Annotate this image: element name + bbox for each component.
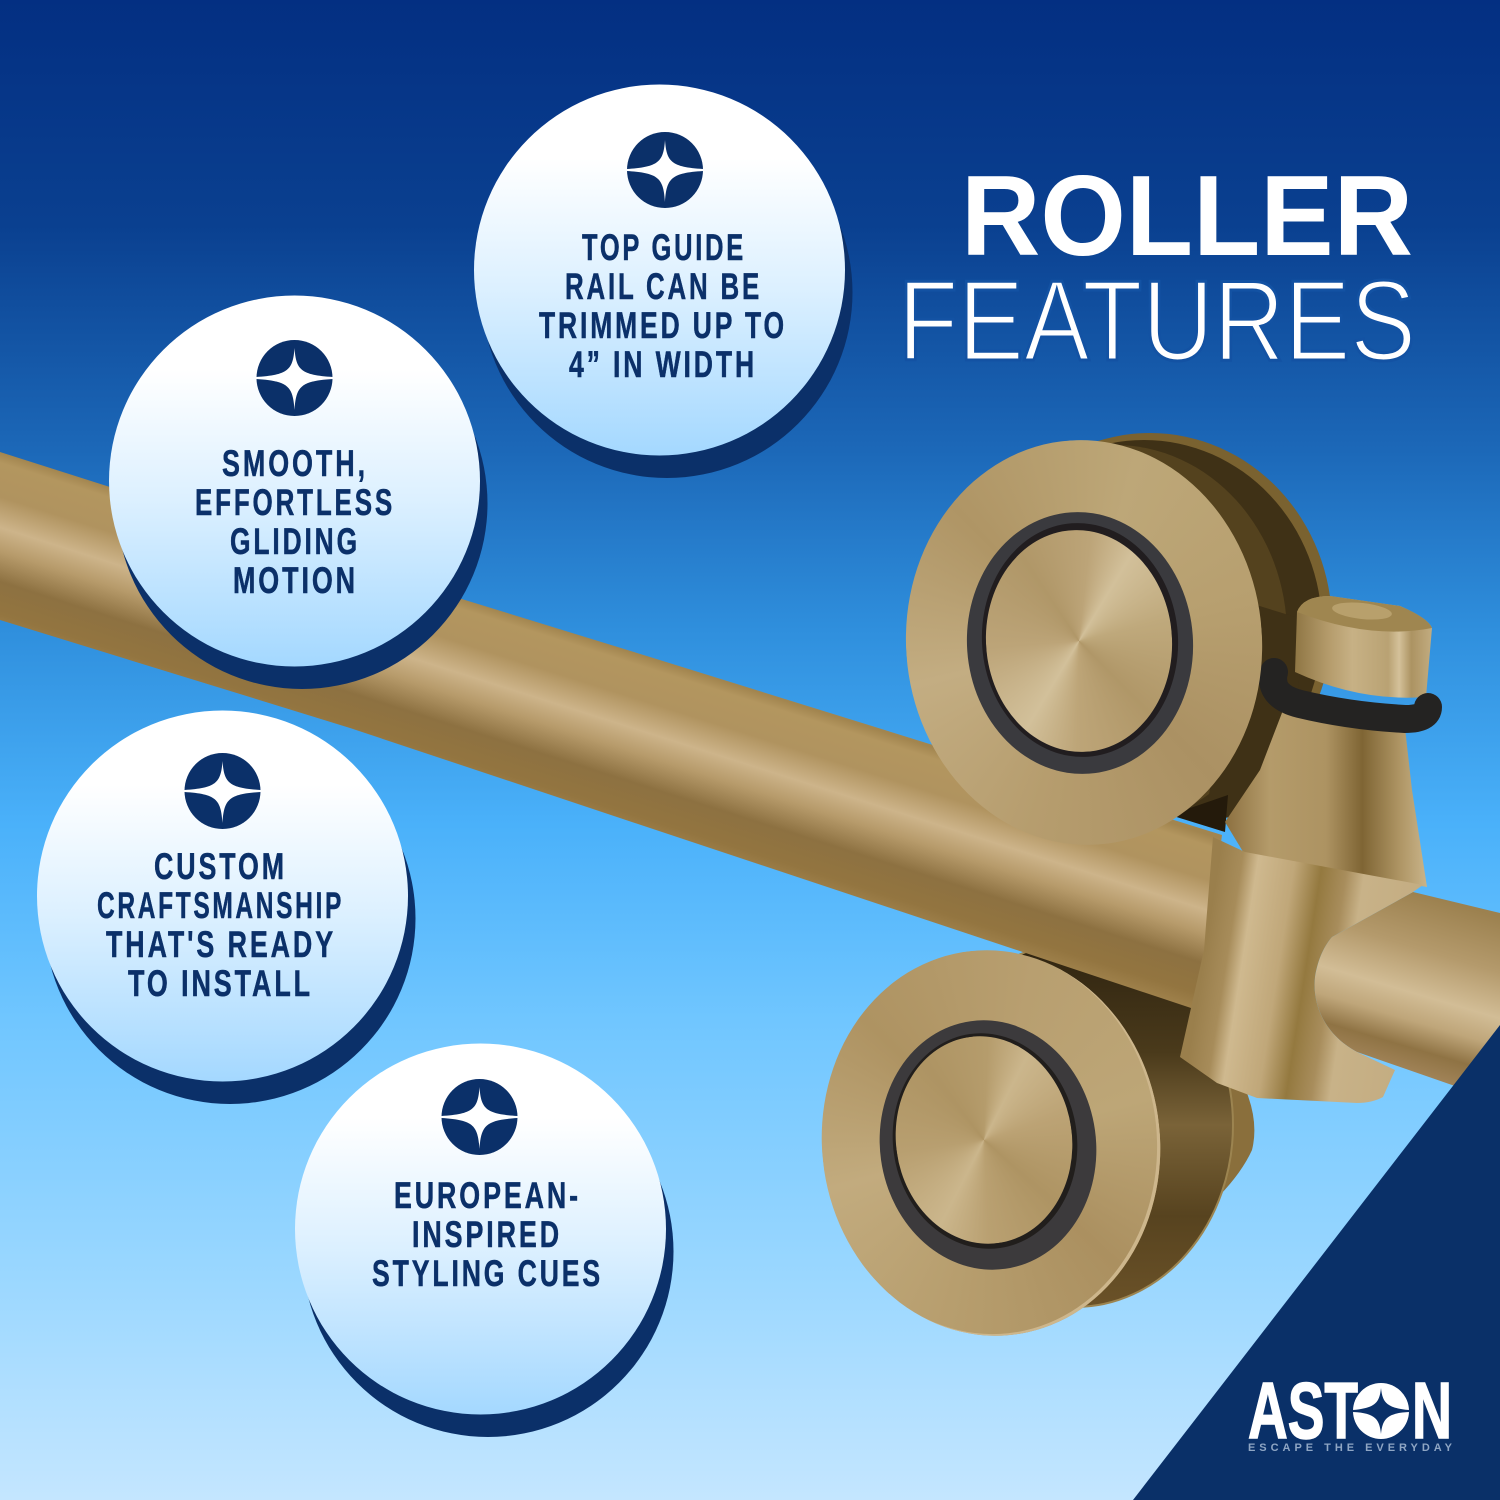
circle face [295, 1044, 666, 1414]
right rail tube [1315, 892, 1500, 1100]
logo wordmark left: AST [1248, 1366, 1358, 1455]
text: EUROPEAN- [394, 1175, 581, 1216]
text: STYLING CUES [372, 1253, 603, 1294]
circle face [37, 710, 408, 1082]
bracket collar and post [1180, 596, 1432, 1103]
circle shadow [116, 318, 488, 689]
bracket neck [1225, 705, 1427, 887]
text: TOP GUIDE [582, 227, 746, 268]
panel: top guide rail [474, 84, 852, 478]
upper wheel flange [892, 428, 1276, 857]
text: MOTION [233, 560, 358, 601]
dark wedge under upper wheel [1170, 795, 1228, 832]
panel: european styling [295, 1044, 674, 1437]
icon: star badge [627, 132, 703, 208]
circle shadow [302, 1066, 674, 1437]
title [898, 153, 1416, 385]
text: SMOOTH, [222, 443, 368, 484]
text: GLIDING [230, 521, 360, 562]
upper roller wheel [892, 428, 1276, 857]
corner triangle [1133, 1025, 1500, 1500]
icon: star badge [184, 753, 260, 829]
text [97, 846, 344, 1004]
lower wheel back groove [917, 943, 1233, 1307]
text: CUSTOM [154, 846, 287, 887]
icon: star badge [442, 1079, 518, 1155]
text: CRAFTSMANSHIP [97, 885, 344, 926]
text: RAIL CAN BE [565, 266, 762, 307]
circle shadow [482, 107, 852, 478]
circle shadow [44, 733, 416, 1104]
text [539, 227, 787, 385]
upper wheel centre cap [978, 524, 1180, 758]
lower wheel flange [803, 933, 1179, 1353]
panel: custom craftsmanship [37, 710, 416, 1104]
icon: star badge [256, 340, 333, 416]
text: TO INSTALL [128, 963, 313, 1004]
text [372, 1175, 603, 1294]
title line 1: ROLLER [961, 153, 1413, 280]
text [195, 443, 395, 601]
circle face [109, 296, 480, 666]
text: EFFORTLESS [195, 482, 395, 523]
text: TRIMMED UP TO [539, 305, 787, 346]
text: INSPIRED [412, 1214, 562, 1255]
lower wheel rubber ring [864, 1006, 1112, 1284]
upper wheel back groove [943, 433, 1332, 825]
o-ring [1273, 672, 1428, 719]
panel: smooth gliding [109, 296, 488, 689]
logo [1248, 1366, 1453, 1455]
bracket collar [1180, 837, 1423, 1103]
logo wordmark right: N [1412, 1366, 1452, 1455]
upper wheel rubber ring [958, 504, 1202, 782]
lower wheel rear rim [1190, 1060, 1254, 1195]
set screw cap [1295, 596, 1432, 698]
circle face [474, 84, 845, 456]
left rail tube [0, 452, 1222, 1011]
text: 4” IN WIDTH [569, 344, 757, 385]
title line 2: FEATURES [898, 258, 1416, 385]
lower wheel centre cap [882, 1025, 1086, 1255]
logo star O [1353, 1383, 1409, 1439]
lower roller wheel [803, 933, 1254, 1353]
logo tagline: ESCAPE THE EVERYDAY [1248, 1442, 1453, 1454]
text: THAT'S READY [106, 924, 336, 965]
set screw head [1297, 596, 1432, 632]
